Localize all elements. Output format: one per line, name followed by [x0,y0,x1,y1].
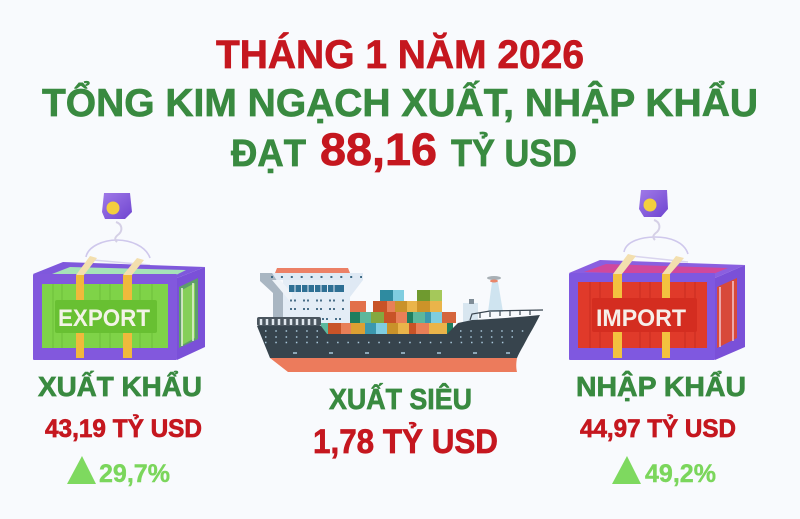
title line 3: ĐẠT [231,133,306,175]
value: 44,97 TỶ USD [580,413,736,443]
bow railing [470,310,543,320]
panel: trade surplus [313,382,498,461]
label text: IMPORT [596,305,686,332]
growth: 29,7% [99,460,170,488]
growth: 49,2% [645,460,716,488]
straps [76,256,144,358]
panel: export [38,371,202,488]
container top [33,262,205,278]
icon: up arrow [67,456,96,484]
container front [33,274,177,360]
label text: EXPORT [58,305,150,332]
superstructure [275,268,350,273]
icon: import container [569,190,745,360]
container side [177,267,205,360]
value: 1,78 TỶ USD [313,423,498,461]
icon: export container [33,193,205,360]
icon: up arrow [612,456,641,484]
portholes [265,331,525,342]
heading: NHẬP KHẨU [576,371,746,402]
heading: XUẤT KHẨU [38,371,202,402]
windows [289,285,344,292]
title [42,32,758,175]
total unit: TỶ USD [451,131,577,175]
heading: XUẤT SIÊU [329,382,472,416]
crane hook [86,193,150,265]
waterline hull [270,358,517,372]
label plate [592,298,697,332]
straps [613,254,684,358]
container front [569,273,715,360]
value: 43,19 TỶ USD [45,413,202,443]
stern railing [257,317,321,326]
container side [715,265,745,360]
hull [257,315,540,358]
title line 2: TỔNG KIM NGẠCH XUẤT, NHẬP KHẨU [42,80,758,125]
crane hook [624,190,688,262]
panel: import [576,371,746,488]
containers [321,290,456,334]
container top [569,260,745,278]
icon: cargo ship [257,268,543,372]
title line 1: THÁNG 1 NĂM 2026 [216,32,584,77]
mast and funnel [463,276,503,323]
label plate [55,300,157,333]
total value: 88,16 [320,124,437,175]
